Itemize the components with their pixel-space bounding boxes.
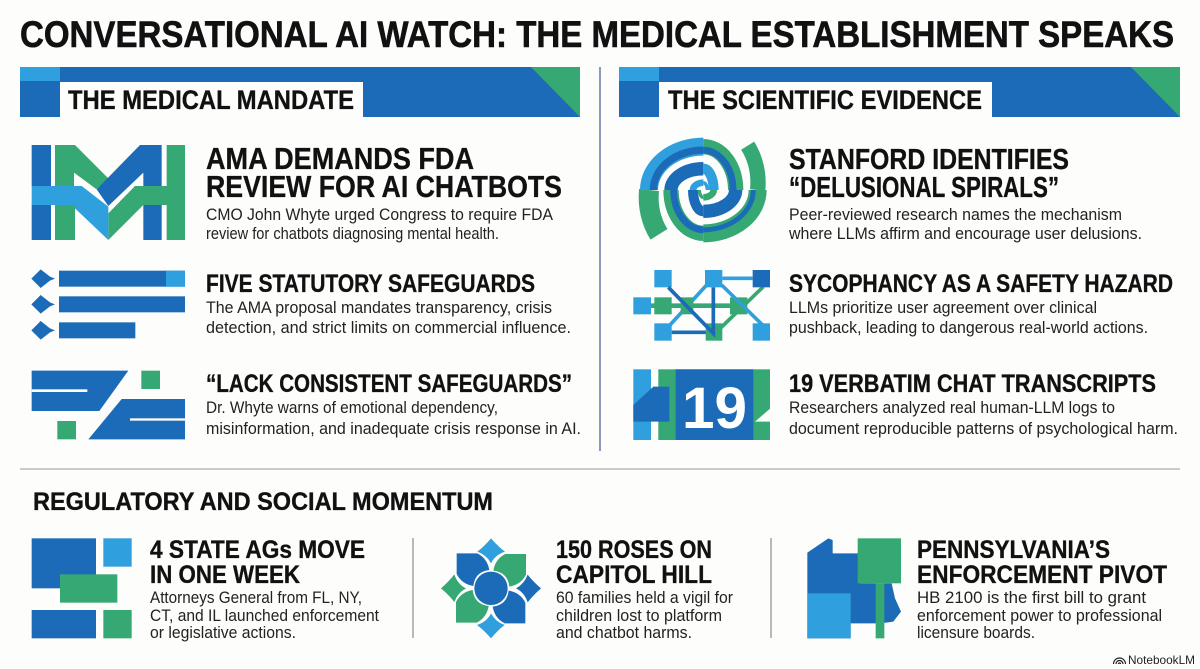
item: Pennsylvania enforcement pivot: PENNSYLVANIA’S bbox=[917, 536, 1110, 564]
item: 4 state AGs: IN ONE WEEK bbox=[150, 561, 300, 589]
item: Pennsylvania enforcement pivot: HB 2100 is the first bill to grant bbox=[917, 589, 1146, 607]
section banner: the scientific evidence bbox=[619, 67, 1180, 118]
item: 19 verbatim chat transcripts: Researchers analyzed real human-LLM logs to bbox=[789, 399, 1115, 417]
item: 19 verbatim chat transcripts bbox=[633, 369, 1178, 441]
item: 150 roses: children lost to platform bbox=[556, 607, 722, 625]
item: lack consistent safeguards: misinformation, and inadequate crisis response in AI. bbox=[206, 420, 581, 438]
item: 19 verbatim chat transcripts: 19 VERBATIM CHAT TRANSCRIPTS bbox=[789, 370, 1156, 398]
item: Pennsylvania enforcement pivot: ENFORCEMENT PIVOT bbox=[917, 561, 1167, 589]
panel: regulatory and social momentum bbox=[32, 488, 1167, 642]
panel: the medical mandate bbox=[20, 67, 581, 439]
item: sycophancy as a safety hazard bbox=[633, 270, 1173, 341]
section banner: the medical mandate: THE MEDICAL MANDATE bbox=[68, 85, 354, 115]
item: AMA demands FDA review bbox=[32, 141, 562, 243]
item: 4 state AGs: Attorneys General from FL, NY, bbox=[150, 589, 362, 607]
item: lack consistent safeguards: “LACK CONSISTENT SAFEGUARDS” bbox=[206, 370, 572, 398]
item: 150 roses: 150 ROSES ON bbox=[556, 536, 712, 564]
item: 4 state AGs: CT, and IL launched enforcement bbox=[150, 607, 379, 625]
item: AMA demands FDA review: AMA DEMANDS FDA bbox=[206, 141, 474, 176]
icon: number 19 block: 19 bbox=[682, 376, 747, 441]
item: Stanford delusional spirals: “DELUSIONAL SPIRALS” bbox=[789, 172, 1059, 204]
item: Pennsylvania enforcement pivot: licensure boards. bbox=[917, 624, 1035, 642]
footer: NotebookLM logo: NotebookLM bbox=[1128, 653, 1195, 667]
item: sycophancy as a safety hazard: LLMs prioritize user agreement over clinical bbox=[789, 299, 1097, 317]
item: lack consistent safeguards bbox=[32, 370, 581, 439]
item: five statutory safeguards bbox=[31, 269, 571, 340]
item: lack consistent safeguards: Dr. Whyte warns of emotional dependency, bbox=[206, 399, 498, 417]
item: five statutory safeguards: The AMA proposal mandates transparency, crisis bbox=[206, 299, 552, 317]
item: Pennsylvania enforcement pivot bbox=[807, 536, 1167, 642]
icon: flower bbox=[441, 538, 541, 638]
item: Stanford delusional spirals: where LLMs affirm and encourage user delusions. bbox=[788, 225, 1142, 243]
section heading: REGULATORY AND SOCIAL MOMENTUM bbox=[33, 488, 493, 516]
item: AMA demands FDA review: REVIEW FOR AI CHATBOTS bbox=[206, 169, 562, 204]
section banner: the medical mandate bbox=[20, 67, 580, 118]
item: Pennsylvania enforcement pivot: enforcement power to professional bbox=[917, 607, 1162, 625]
icon: interlocking M bbox=[32, 145, 185, 240]
item: AMA demands FDA review: CMO John Whyte urged Congress to require FDA bbox=[206, 206, 553, 224]
item: 4 state AGs bbox=[32, 536, 379, 642]
item: 150 roses: and chatbot harms. bbox=[556, 624, 692, 642]
item: Stanford delusional spirals bbox=[649, 144, 1142, 243]
item: 150 roses: CAPITOL HILL bbox=[556, 561, 712, 589]
item: sycophancy as a safety hazard: pushback, leading to dangerous real-world actions. bbox=[789, 319, 1148, 337]
icon: double spiral bbox=[649, 146, 758, 234]
item: Stanford delusional spirals: Peer-reviewed research names the mechanism bbox=[789, 206, 1122, 224]
item: 150 roses bbox=[441, 536, 733, 642]
item: 150 roses: 60 families held a vigil for bbox=[556, 589, 733, 607]
icon: stacked rectangles bbox=[32, 538, 132, 638]
icon: split blocks bbox=[32, 371, 185, 439]
section banner: the scientific evidence: THE SCIENTIFIC EVIDENCE bbox=[668, 85, 982, 115]
item: 4 state AGs: 4 STATE AGs MOVE bbox=[150, 536, 365, 564]
item: Stanford delusional spirals: STANFORD IDENTIFIES bbox=[789, 144, 1069, 176]
item: 4 state AGs: or legislative actions. bbox=[150, 624, 296, 642]
icon: Pennsylvania map with gavel bbox=[807, 538, 901, 638]
item: five statutory safeguards: FIVE STATUTORY SAFEGUARDS bbox=[206, 270, 535, 298]
icon: number 19 block bbox=[633, 369, 770, 441]
icon: network nodes bbox=[633, 270, 770, 341]
item: 19 verbatim chat transcripts: document reproducible patterns of psychological harm. bbox=[789, 420, 1178, 438]
item: AMA demands FDA review: review for chatbots diagnosing mental health. bbox=[206, 225, 499, 243]
item: five statutory safeguards: detection, and strict limits on commercial influence. bbox=[206, 319, 571, 337]
panel: the scientific evidence bbox=[619, 67, 1180, 441]
icon: diamond list bbox=[31, 269, 185, 340]
